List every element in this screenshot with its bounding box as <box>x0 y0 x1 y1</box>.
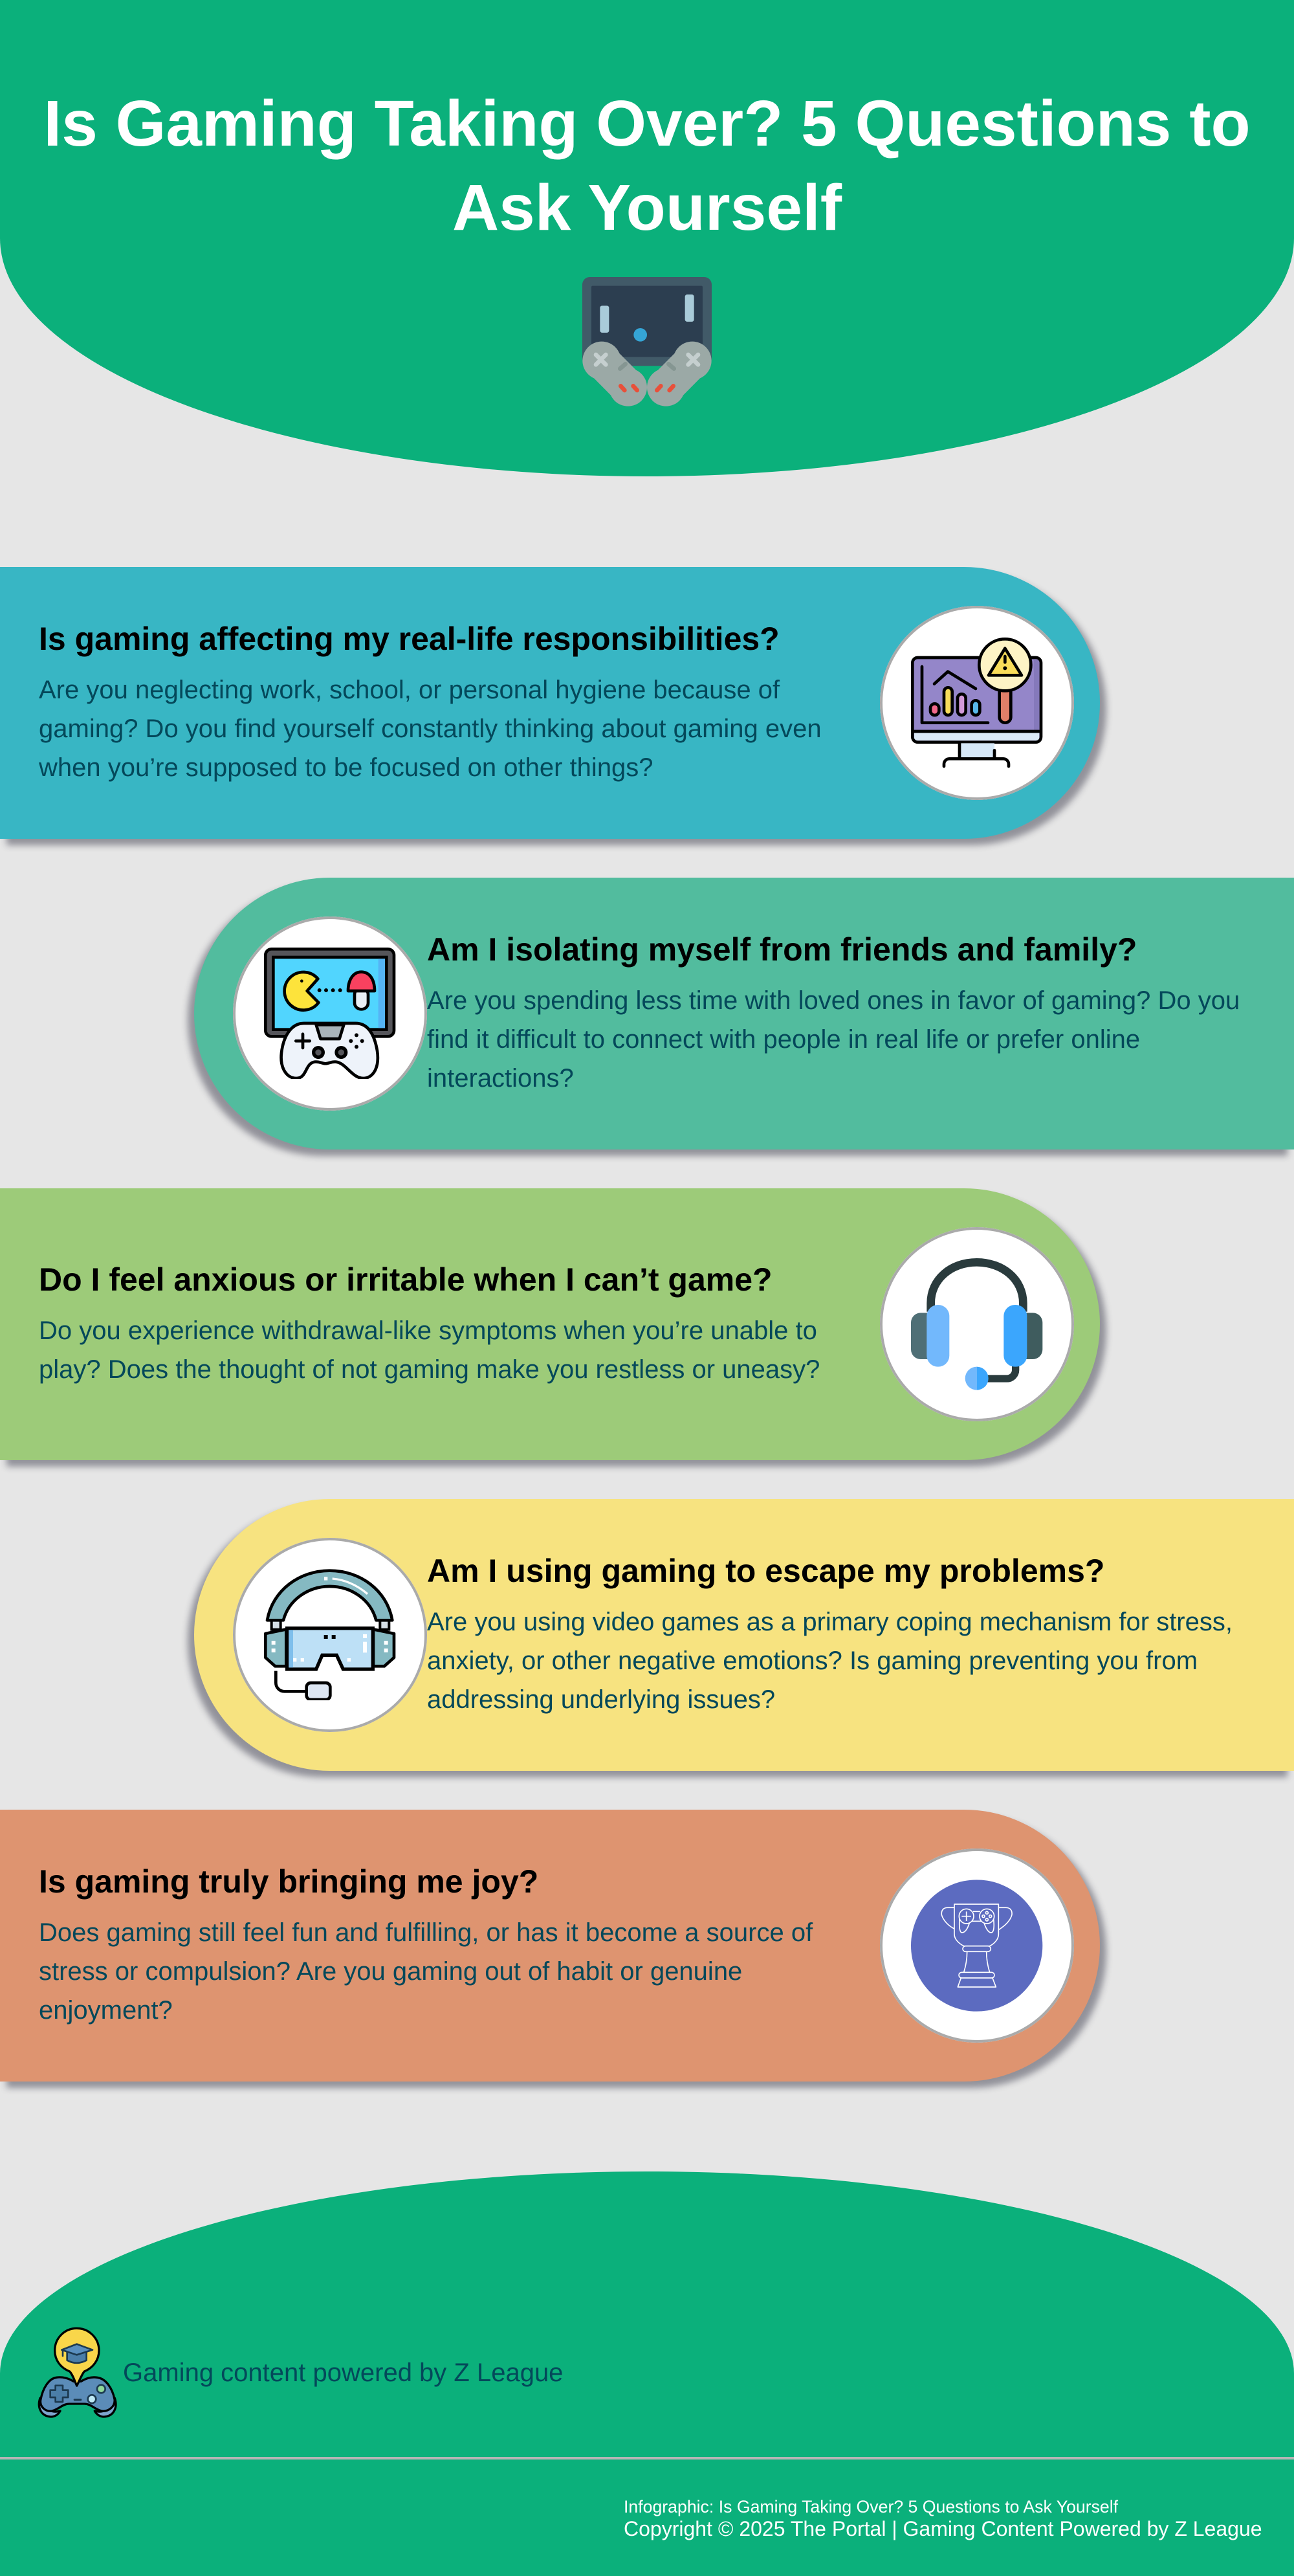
body text: Do you experience withdrawal-like symptoms when you’re unable to <box>39 1316 817 1345</box>
body text <box>427 1608 1233 1714</box>
body text <box>39 676 822 782</box>
body text: Are you neglecting work, school, or personal hygiene because of <box>39 676 780 704</box>
body text: Are you using video games as a primary coping mechanism for stress, <box>427 1608 1233 1636</box>
heading: Is gaming truly bringing me joy? <box>39 1863 538 1900</box>
icon circle <box>880 1849 1074 2043</box>
panel: isolation <box>194 878 1294 1149</box>
title: Is Gaming Taking Over? 5 Questions to <box>43 87 1251 160</box>
body text: find it difficult to connect with people in real life or prefer online <box>427 1025 1140 1054</box>
icon: trophy with controller <box>911 1880 1043 2012</box>
body text: stress or compulsion? Are you gaming out of habit or genuine <box>39 1957 742 1986</box>
header band <box>0 0 1294 476</box>
icon circle <box>880 1227 1074 1421</box>
icon: monitor with chart and warning magnifier <box>911 638 1043 768</box>
icon circle <box>880 606 1074 800</box>
heading: Do I feel anxious or irritable when I can’t game? <box>39 1261 773 1298</box>
body text: enjoyment? <box>39 1996 173 2025</box>
icon circle <box>233 1538 427 1732</box>
panel: anxiety <box>0 1188 1100 1460</box>
body text: addressing underlying issues? <box>427 1685 775 1714</box>
icon: headset <box>911 1258 1043 1390</box>
body text <box>39 1918 813 2025</box>
body text: gaming? Do you find yourself constantly thinking about gaming even <box>39 715 822 743</box>
icon circle <box>233 916 427 1111</box>
heading: Am I isolating myself from friends and family? <box>427 931 1137 968</box>
icon: game screen with controller <box>264 948 396 1079</box>
icon: VR headset <box>264 1569 396 1700</box>
title: Ask Yourself <box>452 172 842 244</box>
body text: play? Does the thought of not gaming make you restless or uneasy? <box>39 1355 820 1384</box>
heading: Is gaming affecting my real-life responsibilities? <box>39 621 780 657</box>
panel: responsibilities <box>0 567 1100 839</box>
footer band <box>0 2171 1294 2576</box>
body text: anxiety, or other negative emotions? Is gaming preventing you from <box>427 1647 1198 1675</box>
body text: Are you spending less time with loved ones in favor of gaming? Do you <box>427 986 1240 1015</box>
footer divider <box>0 2457 1294 2459</box>
heading: Am I using gaming to escape my problems? <box>427 1553 1104 1589</box>
body text: Does gaming still feel fun and fulfilling, or has it become a source of <box>39 1918 813 1947</box>
body text: interactions? <box>427 1064 574 1093</box>
panel: escape <box>194 1499 1294 1771</box>
footer powered-by text: Gaming content powered by Z League <box>123 2359 563 2387</box>
body text <box>39 1316 820 1384</box>
footer caption: Infographic: Is Gaming Taking Over? 5 Questions to Ask Yourself <box>624 2497 1118 2516</box>
title <box>43 87 1251 244</box>
body text: when you’re supposed to be focused on other things? <box>39 753 653 782</box>
panel: joy <box>0 1810 1100 2082</box>
icon: arcade screen with two controllers <box>582 277 712 406</box>
body text <box>427 986 1240 1093</box>
footer logo: controller with graduation cap bubble <box>38 2327 117 2418</box>
footer copyright: Copyright © 2025 The Portal | Gaming Content Powered by Z League <box>624 2517 1262 2540</box>
